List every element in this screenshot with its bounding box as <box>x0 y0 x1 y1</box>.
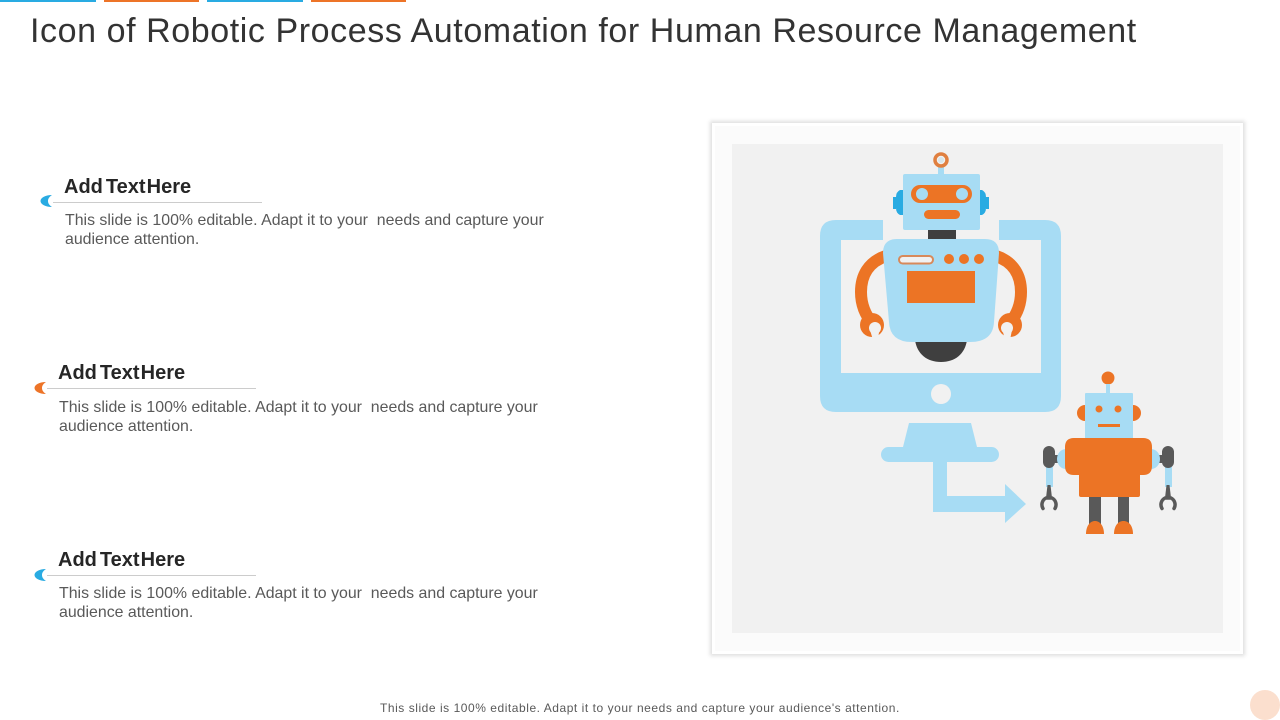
heading 2: Add Text Here <box>58 362 185 384</box>
text block 1 <box>40 176 544 248</box>
divider 1 <box>53 202 262 203</box>
body 3: This slide is 100% editable. Adapt it to your needs and capture your audience attention. <box>59 585 538 621</box>
heading 1: Add Text Here <box>64 176 191 198</box>
text block 2 <box>34 362 538 435</box>
panel: illustration frame <box>712 123 1243 654</box>
divider 2 <box>47 388 256 389</box>
arrow: monitor to small robot <box>933 462 1026 523</box>
divider 3 <box>47 575 256 576</box>
page number badge <box>1250 690 1280 720</box>
heading 3: Add Text Here <box>58 549 185 571</box>
icon: monitor <box>820 220 1061 462</box>
text block 3 <box>34 549 538 621</box>
crescent marker 2 <box>34 382 46 394</box>
title: Icon of Robotic Process Automation for Human Resource Management <box>30 12 1137 50</box>
body 2: This slide is 100% editable. Adapt it to your needs and capture your audience attention. <box>59 399 538 435</box>
footer note: This slide is 100% editable. Adapt it to your needs and capture your audience's attention. <box>380 701 900 715</box>
body 1: This slide is 100% editable. Adapt it to your needs and capture your audience attention. <box>65 212 544 248</box>
panel: illustration background <box>732 144 1223 633</box>
top accent bars <box>0 0 406 2</box>
icon: large robot <box>860 154 1022 362</box>
crescent marker 3 <box>34 569 46 581</box>
crescent marker 1 <box>40 195 52 207</box>
icon: small robot <box>1042 372 1175 534</box>
